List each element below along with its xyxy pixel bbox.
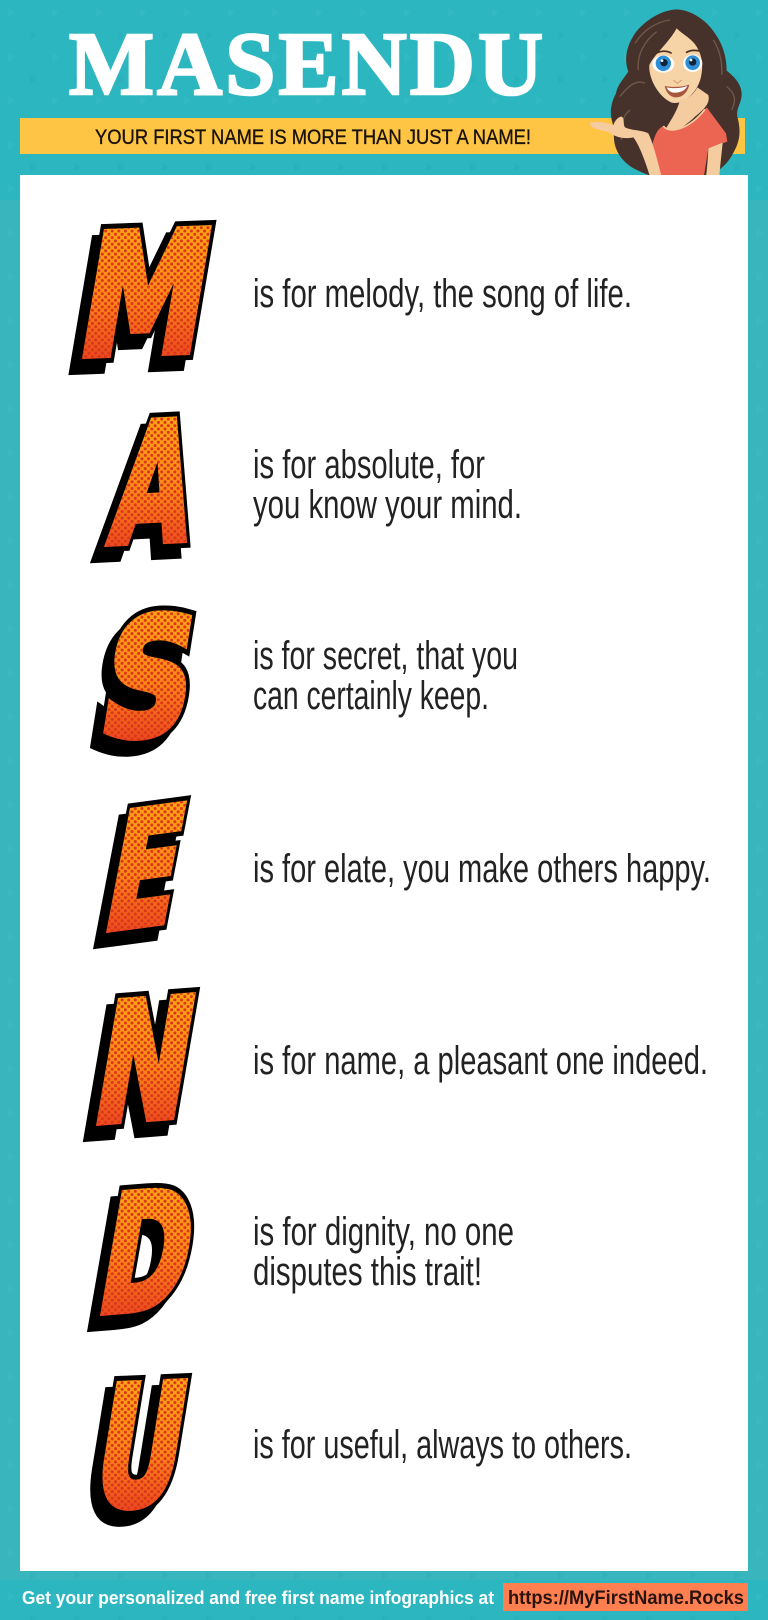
- comic letter A: A: [102, 388, 206, 582]
- lines: dignity: disputes this trait!: [253, 1250, 482, 1294]
- lines: secret: can certainly keep.: [253, 674, 489, 718]
- comic letter S: S: [90, 583, 209, 776]
- footer call to action: Get your personalized and free first name infographics at: [22, 1587, 494, 1608]
- lines: dignity: [253, 1210, 514, 1294]
- letter N row: [82, 986, 706, 1142]
- letter S row: [90, 606, 516, 757]
- lines: dignity: is for dignity, no one: [253, 1210, 514, 1254]
- comic letter M: M: [58, 208, 216, 406]
- lines: absolute: is for absolute, for: [253, 443, 485, 487]
- title: MASENDU: [69, 15, 543, 114]
- letter A row: [90, 411, 520, 564]
- illustration: cartoon woman presenting: [590, 9, 742, 180]
- comic letter U: [90, 1372, 192, 1527]
- comic letter U: U: [83, 1350, 200, 1546]
- comic letter E: E: [83, 784, 189, 980]
- subtitle banner: YOUR FIRST NAME IS MORE THAN JUST A NAME!: [95, 126, 531, 149]
- letter E row: [93, 795, 708, 950]
- comic letter D: D: [87, 1156, 208, 1351]
- line: useful: is for useful, always to others.: [253, 1423, 632, 1467]
- letter D row: [87, 1183, 513, 1332]
- comic letter A: A: [93, 399, 197, 593]
- comic letter N: N: [82, 963, 208, 1162]
- comic letter D: [87, 1183, 194, 1332]
- lines: absolute: [253, 443, 522, 527]
- footer URL badge: https://MyFirstName.Rocks: [508, 1588, 744, 1609]
- subtitle banner: [20, 118, 745, 154]
- comic letter S: S: [81, 594, 200, 787]
- comic letter N: N: [73, 974, 199, 1173]
- comic letter U: U: [74, 1361, 191, 1557]
- comic letter E: E: [92, 773, 198, 969]
- letter U row: [90, 1372, 630, 1527]
- letter M row: [68, 220, 630, 376]
- comic letter M: M: [67, 197, 225, 395]
- lines: secret: is for secret, that you: [253, 634, 518, 678]
- lines: absolute: you know your mind.: [253, 483, 522, 527]
- lines: secret: [253, 634, 518, 718]
- line: melody: is for melody, the song of life.: [253, 272, 632, 316]
- comic letter D: D: [78, 1167, 199, 1362]
